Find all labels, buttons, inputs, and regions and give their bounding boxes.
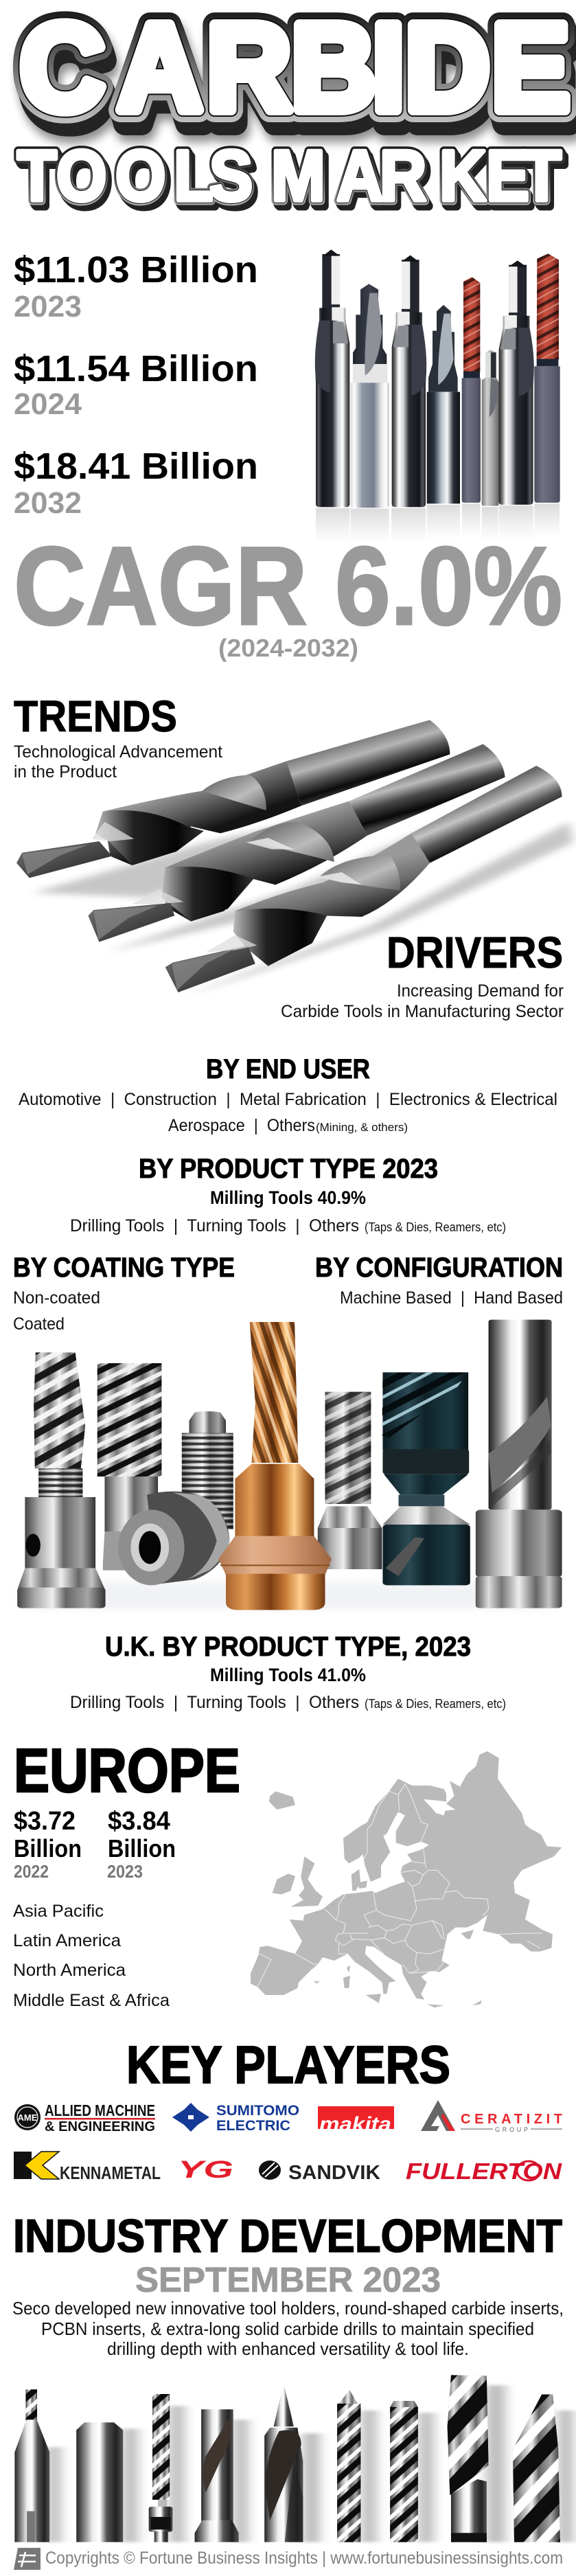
drivers block: Carbide Tools in Manufacturing Sector <box>281 1002 564 1021</box>
by configuration: Machine Based | Hand Based <box>340 1288 563 1308</box>
tool 2 <box>351 284 389 508</box>
logo: Allied Machine & Engineering: AME <box>18 2112 38 2123</box>
logo: Allied Machine & Engineering: & ENGINEERING <box>45 2119 155 2134</box>
lying bushing <box>118 1492 229 1585</box>
drivers block: Increasing Demand for <box>397 981 564 1001</box>
europe 2022 value: $3.72 <box>14 1807 76 1836</box>
drill 3 <box>165 766 562 992</box>
market values <box>14 249 258 520</box>
title: Carbide: CARBIDE <box>20 0 570 137</box>
by product type 2023: (Taps & Dies, Reamers, etc) <box>365 1220 506 1234</box>
logo: Makita: makita <box>319 2113 391 2136</box>
bit 1 <box>14 2389 49 2542</box>
u.k. by product type <box>70 1632 506 1712</box>
key players heading: KEY PLAYERS <box>126 2036 450 2095</box>
tool 6 <box>482 350 499 506</box>
market values: $11.54 Billion <box>14 348 258 389</box>
logo: Kennametal: KENNAMETAL <box>60 2163 161 2183</box>
logo: Allied Machine & Engineering: ALLIED MACHINE <box>45 2101 155 2119</box>
market values: $18.41 Billion <box>14 446 258 487</box>
ground shadows <box>22 1582 551 1609</box>
threaded stud <box>182 1411 233 1529</box>
logo: YG: YG <box>178 2156 233 2183</box>
copper tool <box>218 1322 332 1610</box>
u.k. by product type: U.K. BY PRODUCT TYPE, 2023 <box>105 1632 471 1662</box>
other regions list <box>13 1902 170 2010</box>
bit 7 <box>390 2401 418 2542</box>
logo: Sumitomo Electric: SUMITOMO <box>216 2103 299 2119</box>
logo: Makita <box>318 2106 394 2136</box>
by coating type <box>13 1253 235 1334</box>
image: row of drill bits <box>14 2375 573 2542</box>
tool 7 <box>499 260 534 505</box>
market values: 2032 <box>14 486 82 520</box>
logo: Sumitomo Electric: ELECTRIC <box>216 2118 290 2134</box>
by product type 2023 <box>70 1154 506 1235</box>
logo: Ceratizit Group <box>421 2100 562 2133</box>
CAGR period: (2024-2032) <box>218 634 358 662</box>
logo: Sumitomo Electric <box>172 2103 299 2134</box>
tool 4 <box>427 305 460 503</box>
tall shaft holder <box>476 1320 562 1608</box>
drill 2 <box>88 744 505 942</box>
helical holder left <box>97 1363 161 1571</box>
by coating type: Coated <box>13 1314 65 1334</box>
other regions list: Latin America <box>13 1931 121 1950</box>
tool 5 <box>462 277 481 503</box>
logo: Ceratizit Group: CERATIZIT <box>461 2112 562 2127</box>
europe 2022 value: 2022 <box>14 1861 49 1882</box>
by coating type: Non-coated <box>13 1288 100 1308</box>
europe 2023 value: $3.84 <box>108 1807 170 1836</box>
by configuration <box>315 1253 563 1308</box>
u.k. by product type: Drilling Tools | Turning Tools | Others <box>70 1693 359 1712</box>
development description: drilling depth with enhanced versatility & tool life. <box>107 2338 469 2359</box>
market values: $11.03 Billion <box>14 249 258 290</box>
bit 5 <box>264 2383 303 2542</box>
helical holder right <box>318 1392 382 1569</box>
title: Carbide: CARBIDE <box>20 0 570 137</box>
dark teal holder <box>382 1372 470 1585</box>
logo: Sandvik <box>259 2161 380 2184</box>
image: carbide tool holders <box>17 1320 562 1610</box>
trends block: Technological Advancement <box>14 742 222 762</box>
bit 2 <box>76 2422 123 2542</box>
by product type 2023: BY PRODUCT TYPE 2023 <box>139 1154 438 1184</box>
by product type 2023: Drilling Tools | Turning Tools | Others <box>70 1216 359 1235</box>
other regions list: Middle East & Africa <box>13 1991 170 2010</box>
other regions list: North America <box>13 1961 126 1980</box>
u.k. by product type: (Taps & Dies, Reamers, etc) <box>365 1697 506 1711</box>
by coating type: BY COATING TYPE <box>13 1253 235 1283</box>
bit 9 <box>513 2395 560 2542</box>
image: three carbide drills <box>16 720 573 996</box>
logo: Allied Machine & Engineering <box>14 2101 155 2134</box>
tool 8 <box>534 253 560 503</box>
logo: Fullerton: FULLERTON <box>406 2158 562 2184</box>
development description <box>12 2298 564 2359</box>
by end user <box>19 1054 557 1135</box>
europe heading: EUROPE <box>14 1737 240 1805</box>
development description: PCBN inserts, & extra-long solid carbide drills to maintain specified <box>41 2318 534 2339</box>
title: Carbide: CARBIDE <box>20 0 570 137</box>
logo: Ceratizit Group: GROUP <box>495 2126 528 2133</box>
tool 1 <box>315 249 349 507</box>
title: Tools Market: TOOLSMARKET <box>17 136 562 216</box>
tool 3 <box>392 255 426 507</box>
logo: Sandvik: SANDVIK <box>288 2162 380 2184</box>
market values: 2023 <box>14 290 82 323</box>
drill 1 <box>16 720 450 878</box>
logo: Kennametal <box>14 2152 161 2183</box>
europe 2023 value: 2023 <box>107 1861 143 1882</box>
trends block: in the Product <box>14 762 117 782</box>
bit 3 <box>149 2394 172 2542</box>
footer logo <box>14 2548 41 2570</box>
by end user: (Mining, & others) <box>316 1121 408 1134</box>
u.k. by product type: Milling Tools 41.0% <box>210 1665 366 1685</box>
europe 2023 value <box>107 1807 176 1882</box>
trends block <box>14 692 222 782</box>
by end user: Automotive | Construction | Metal Fabrication | Electronics & Electrical <box>19 1090 557 1109</box>
bit 8 <box>448 2375 489 2542</box>
by end user: Aerospace | Others <box>168 1116 315 1135</box>
development date: SEPTEMBER 2023 <box>135 2260 441 2299</box>
bit 4 <box>195 2409 239 2542</box>
market values: 2024 <box>14 387 82 421</box>
other regions list: Asia Pacific <box>13 1902 104 1921</box>
drivers block: DRIVERS <box>387 928 563 977</box>
map of Europe <box>251 1751 562 2007</box>
reflections <box>316 503 560 543</box>
europe 2023 value: Billion <box>108 1834 176 1862</box>
by end user: BY END USER <box>206 1054 370 1084</box>
title: Tools Market: TOOLSMARKET <box>17 136 562 216</box>
trends block: TRENDS <box>14 692 177 741</box>
image: row of carbide drills <box>315 249 560 543</box>
drop shadows <box>48 2385 573 2542</box>
threaded tool <box>17 1352 106 1608</box>
by product type 2023: Milling Tools 40.9% <box>210 1187 366 1208</box>
europe 2022 value <box>14 1807 82 1882</box>
drivers block <box>281 928 564 1021</box>
shadows <box>33 806 573 996</box>
europe 2022 value: Billion <box>14 1834 82 1862</box>
bit 6 <box>337 2390 360 2542</box>
title: Tools Market: TOOLSMARKET <box>17 136 562 216</box>
